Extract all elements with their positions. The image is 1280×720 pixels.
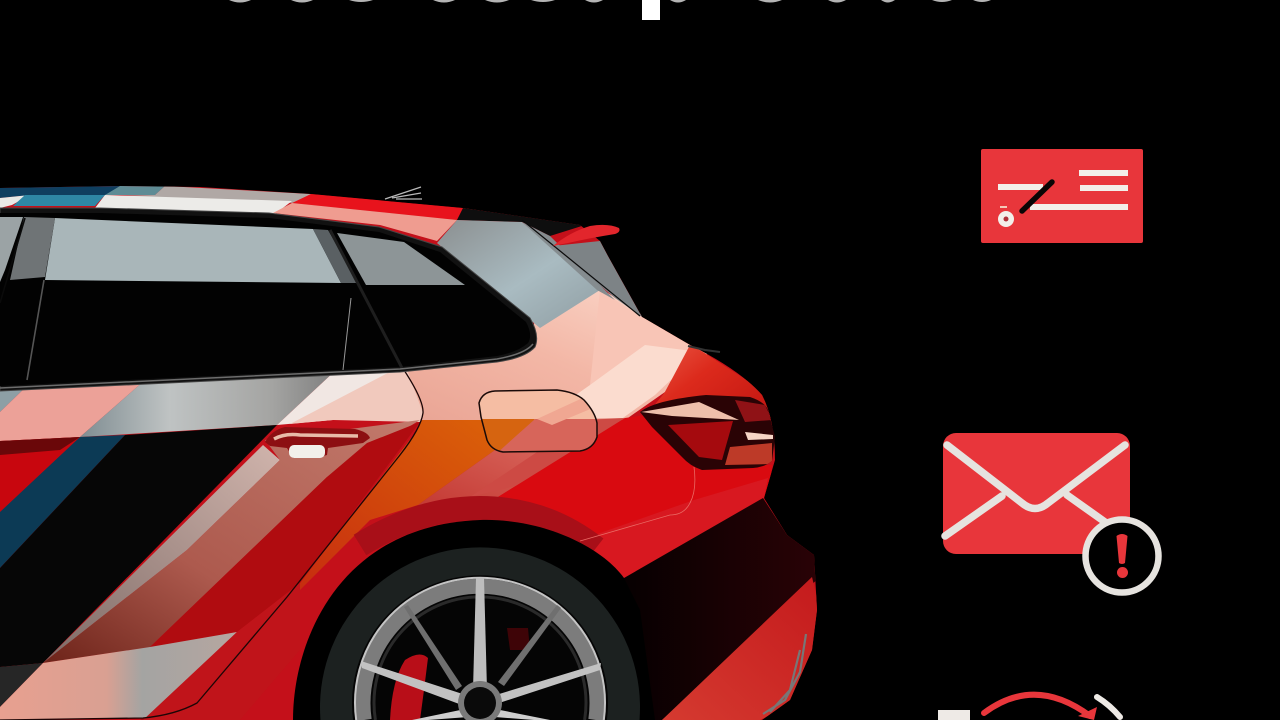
- icon: envelope with alert: [943, 433, 1158, 592]
- C-pillar grey panels: [437, 220, 642, 328]
- door seam: [0, 367, 423, 720]
- seal: [998, 206, 1014, 227]
- card text lines: [998, 170, 1128, 210]
- roof stripes: [0, 186, 585, 241]
- icon: document card: [981, 149, 1143, 243]
- brake caliper: [390, 654, 428, 720]
- bumper seam line: [580, 467, 695, 541]
- car body wrap panels: [0, 180, 830, 720]
- wiper: [688, 346, 720, 352]
- door diagonal stripes: [0, 420, 420, 720]
- door upper stripes: [0, 364, 423, 441]
- rear quarter pink panels: [395, 288, 775, 420]
- wheel arch: [293, 520, 655, 720]
- hub: [458, 681, 502, 720]
- alert badge: [1086, 520, 1158, 592]
- lower bumper red band: [662, 577, 820, 720]
- spokes: [361, 578, 601, 720]
- wheel arch lip: [360, 508, 596, 548]
- icon: clipped refresh arc: [938, 695, 1120, 720]
- side window frame: [0, 208, 537, 391]
- window glass: [0, 213, 533, 388]
- door handle: [265, 427, 370, 458]
- rim: [352, 575, 608, 720]
- car illustration: [0, 180, 830, 720]
- envelope flap lines: [945, 445, 1125, 536]
- antenna: [385, 187, 422, 199]
- window reflection rear quarter: [337, 233, 465, 285]
- orange, salmon and red diagonal bands: [140, 415, 772, 720]
- dark lower rear band: [624, 498, 816, 720]
- fuel door: [478, 389, 598, 453]
- spoiler: [553, 225, 620, 246]
- tail light: [640, 395, 775, 470]
- window reflection main: [45, 218, 341, 283]
- rear diffuser: [763, 634, 806, 714]
- tyre: [320, 547, 640, 720]
- clipped title fragment at top edge: [229, 0, 991, 20]
- pen stroke: [1022, 182, 1052, 211]
- rear wheel: [293, 520, 655, 720]
- pillars: [10, 217, 55, 280]
